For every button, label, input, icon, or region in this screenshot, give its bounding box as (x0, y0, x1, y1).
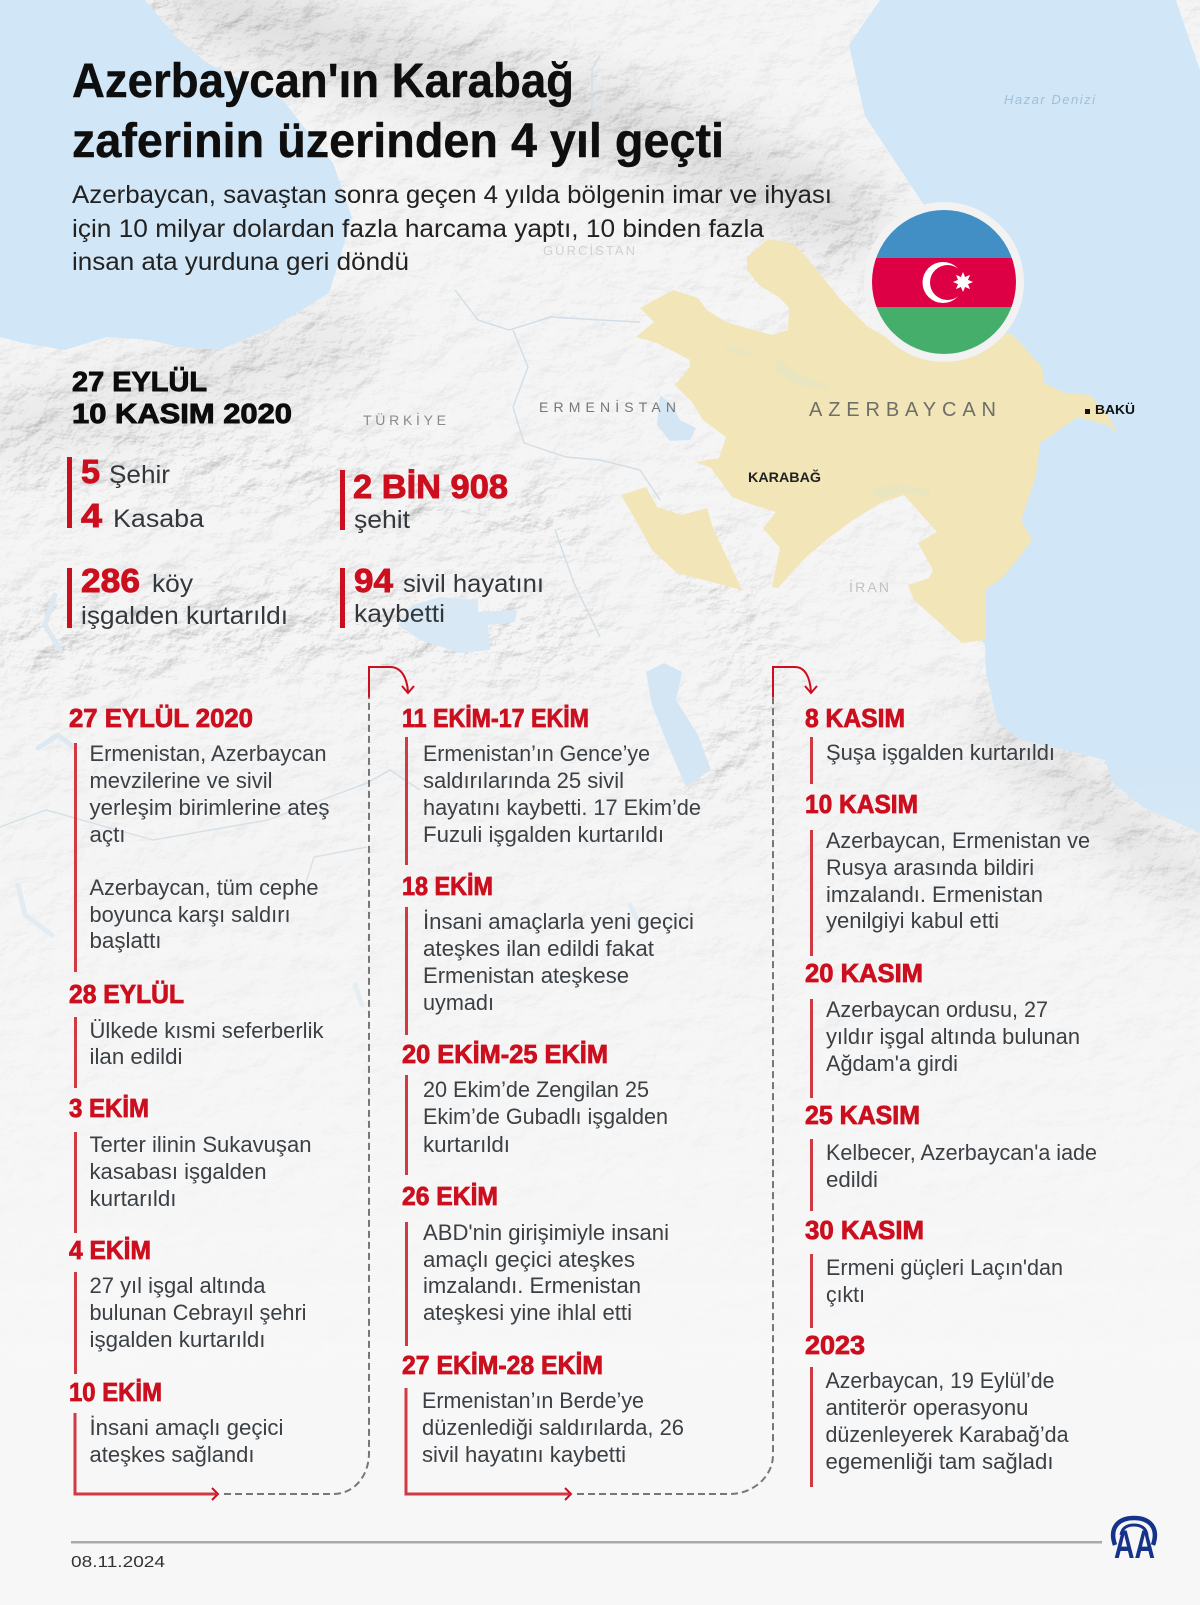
timeline entry: 18 Ekim: ateşkes ilan edildi fakat (423, 936, 654, 961)
timeline entry: 20 Kasım: yıldır işgal altında bulunan (826, 1024, 1080, 1049)
reservoirs (18, 595, 640, 1005)
icon: Azerbaijan flag (860, 202, 1030, 362)
label: Bakü: BAKÜ (1095, 402, 1135, 417)
timeline entry: 10 Kasım: 10 KASIM (805, 789, 918, 819)
timeline entry: 18 Ekim: Ermenistan ateşkese (423, 963, 629, 988)
timeline entry: 27 Eylül 2020 (69, 703, 330, 972)
timeline entry: 30 Kasım: 30 KASIM (805, 1215, 924, 1245)
fade to page background (0, 760, 1200, 1400)
arrow: column 1 to column 2 (75, 667, 414, 1500)
timeline entry: 25 Kasım: edildi (826, 1167, 878, 1192)
timeline entry: 20 Kasım (805, 958, 1080, 1098)
timeline entry: 26 Ekim: ABD'nin girişimiyle insani (423, 1220, 669, 1245)
timeline entry: 11-17 Ekim: hayatını kaybetti. 17 Ekim’de (423, 795, 701, 820)
map: inland water on Azerbaijan (725, 345, 930, 500)
label: Hazar Denizi: Hazar Denizi (1004, 92, 1096, 107)
label: Karabağ: KARABAĞ (748, 468, 821, 485)
timeline entry: 8 Kasım: Şuşa işgalden kurtarıldı (826, 740, 1055, 765)
date: 08.11.2024 (71, 1554, 165, 1571)
timeline entry: 2023: düzenleyerek Karabağ’da (826, 1422, 1069, 1447)
stat: 5 şehir, 4 kasaba: Kasaba (113, 505, 204, 533)
icon: AA logo: AA (1114, 1523, 1155, 1567)
timeline entry: 20-25 Ekim: kurtarıldı (423, 1132, 510, 1157)
lake: Urmia (646, 663, 711, 787)
timeline entry: 27-28 Ekim (402, 1350, 684, 1467)
timeline entry: 4 Ekim: 4 EKİM (69, 1235, 151, 1265)
timeline entry: 28 Eylül: Ülkede kısmi seferberlik (90, 1018, 325, 1043)
timeline entry: 3 Ekim: Terter ilinin Sukavuşan (90, 1132, 312, 1157)
stat: 2 bin 908 şehit (340, 468, 508, 534)
timeline entry: 11-17 Ekim: 11 EKİM-17 EKİM (402, 703, 589, 733)
arrow: column 2 to column 3 (406, 667, 817, 1500)
timeline entry: 26 Ekim: amaçlı geçici ateşkes (423, 1247, 635, 1272)
heading: war dates: 27 EYLÜL (72, 366, 207, 397)
stat: 286 köy: köy (152, 570, 194, 598)
timeline entry: 8 Kasım: 8 KASIM (805, 703, 905, 733)
timeline entry: 4 Ekim: işgalden kurtarıldı (90, 1327, 266, 1352)
subtitle (72, 181, 832, 276)
timeline entry: 27 Eylül 2020: boyunca karşı saldırı (90, 902, 290, 927)
timeline entry: 26 Ekim: ateşkesi yine ihlal etti (423, 1300, 632, 1325)
timeline entry: 10 Ekim: 10 EKİM (69, 1377, 162, 1407)
timeline entry: 3 Ekim: kasabası işgalden (90, 1159, 266, 1184)
timeline entry: 27 Eylül 2020: açtı (90, 822, 126, 847)
timeline entry: 27 Eylül 2020: Ermenistan, Azerbaycan (90, 741, 326, 766)
timeline entry: 10 Kasım: yenilgiyi kabul etti (826, 908, 999, 933)
stat: 2 bin 908 şehit: şehit (354, 506, 410, 534)
lake: Sevan (657, 395, 696, 441)
stat: 5 şehir, 4 kasaba: 4 (81, 497, 103, 534)
timeline entry: 20-25 Ekim: Ekim’de Gubadlı işgalden (423, 1104, 668, 1129)
timeline entry: 18 Ekim: 18 EKİM (402, 871, 493, 901)
timeline entry: 10 Kasım (805, 789, 1090, 956)
lake: Van (398, 597, 517, 653)
timeline entry: 2023: egemenliği tam sağladı (826, 1449, 1054, 1474)
heading: war dates: 10 KASIM 2020 (72, 398, 292, 429)
timeline entry: 18 Ekim: uymadı (423, 990, 494, 1015)
timeline entry: 27-28 Ekim: 27 EKİM-28 EKİM (402, 1350, 603, 1380)
timeline entry: 10 Kasım: imzalandı. Ermenistan (826, 882, 1043, 907)
timeline entry: 11-17 Ekim: saldırılarında 25 sivil (423, 768, 624, 793)
stat: 5 şehir, 4 kasaba (67, 453, 204, 534)
title (72, 55, 724, 168)
timeline entry: 2023: antiterör operasyonu (826, 1395, 1028, 1420)
timeline entry: 28 Eylül: ilan edildi (90, 1044, 182, 1069)
timeline entry: 4 Ekim: 27 yıl işgal altında (90, 1273, 266, 1298)
timeline entry: 20 Kasım: Ağdam'a girdi (826, 1051, 958, 1076)
stat: 5 şehir, 4 kasaba: Şehir (109, 461, 170, 489)
stat: 94 sivil: 94 (354, 562, 394, 599)
timeline entry: 26 Ekim: imzalandı. Ermenistan (423, 1273, 641, 1298)
timeline entry: 2023: Azerbaycan, 19 Eylül’de (826, 1368, 1054, 1393)
label: Türkiye: TÜRKİYE (363, 411, 446, 428)
timeline entry: 8 Kasım (805, 703, 1055, 784)
timeline entry: 4 Ekim (69, 1235, 306, 1374)
timeline entry: 27 Eylül 2020: başlattı (90, 928, 162, 953)
footer (71, 1518, 1155, 1571)
stat: 286 köy (67, 562, 288, 630)
timeline entry: 10 Kasım: Azerbaycan, Ermenistan ve (826, 828, 1090, 853)
timeline entry: 25 Kasım (805, 1100, 1097, 1211)
timeline entry: 25 Kasım: 25 KASIM (805, 1100, 920, 1130)
stat: 94 sivil: sivil hayatını (403, 570, 544, 598)
icon: AA logo (1113, 1518, 1155, 1567)
Caspian Sea (849, 0, 1200, 833)
title: zaferinin üzerinden 4 yıl geçti (72, 115, 724, 168)
timeline entry: 27 Eylül 2020: yerleşim birimlerine ateş (90, 795, 330, 820)
timeline entry: 26 Ekim (402, 1181, 669, 1346)
stat: 5 şehir, 4 kasaba: 5 (81, 453, 100, 490)
label: Gürcistan: GÜRCİSTAN (543, 243, 635, 258)
timeline entry: 28 Eylül (69, 979, 325, 1088)
timeline entry: 2023 (805, 1330, 1069, 1487)
stat: 286 köy: 286 (81, 562, 140, 599)
map labels (363, 92, 1135, 595)
timeline entry: 18 Ekim (402, 871, 694, 1035)
timeline entry: 20 Kasım: Azerbaycan ordusu, 27 (826, 997, 1048, 1022)
timeline entry: 10 Kasım: Rusya arasında bildiri (826, 855, 1034, 880)
timeline entry: 11-17 Ekim: Ermenistan’ın Gence’ye (423, 741, 650, 766)
timeline entry: 10 Ekim: ateşkes sağlandı (90, 1442, 254, 1467)
subtitle: için 10 milyar dolardan fazla harcama yaptı, 10 binden fazla (72, 215, 764, 243)
timeline entry: 3 Ekim: 3 EKİM (69, 1093, 149, 1123)
timeline entry: 27 Eylül 2020: 27 EYLÜL 2020 (69, 703, 253, 733)
timeline entry: 27 Eylül 2020: mevzilerine ve sivil (90, 768, 272, 793)
timeline entry: 10 Ekim (69, 1377, 284, 1467)
label: İran: İRAN (849, 578, 889, 595)
timeline entry: 3 Ekim (69, 1093, 312, 1233)
timeline entry: 27-28 Ekim: düzenlediği saldırılarda, 26 (422, 1415, 684, 1440)
timeline entry: 30 Kasım: çıktı (826, 1282, 865, 1307)
timeline entry: 2023: 2023 (805, 1330, 865, 1360)
timeline entry: 11-17 Ekim: Fuzuli işgalden kurtarıldı (423, 822, 664, 847)
map: Azerbaijan territory (621, 239, 1117, 643)
label: Azerbaycan: AZERBAYCAN (809, 399, 996, 421)
timeline entry: 27-28 Ekim: Ermenistan’ın Berde’ye (422, 1388, 644, 1413)
subtitle: Azerbaycan, savaştan sonra geçen 4 yılda bölgenin imar ve ihyası (72, 181, 832, 209)
timeline entry: 4 Ekim: bulunan Cebrayıl şehri (90, 1300, 306, 1325)
stat: 286 köy: işgalden kurtarıldı (81, 602, 288, 630)
Black Sea (0, 0, 352, 350)
timeline entry: 10 Ekim: İnsani amaçlı geçici (90, 1415, 284, 1440)
timeline entry: 20 Kasım: 20 KASIM (805, 958, 923, 988)
timeline entry: 30 Kasım (805, 1215, 1063, 1328)
timeline entry: 27-28 Ekim: sivil hayatını kaybetti (422, 1442, 626, 1467)
timeline entry: 27 Eylül 2020: Azerbaycan, tüm cephe (90, 875, 318, 900)
timeline entry: 3 Ekim: kurtarıldı (90, 1186, 176, 1211)
map: Nakhchivan (621, 487, 742, 590)
timeline entry: 11-17 Ekim (402, 703, 701, 865)
timeline entry: 18 Ekim: İnsani amaçlarla yeni geçici (423, 909, 694, 934)
timeline entry: 20-25 Ekim: 20 EKİM-25 EKİM (402, 1039, 608, 1069)
stat: 94 sivil: kaybetti (354, 600, 445, 628)
timeline entry: 28 Eylül: 28 EYLÜL (69, 979, 184, 1009)
timeline entry: 20-25 Ekim (402, 1039, 668, 1175)
title: Azerbaycan'ın Karabağ (72, 55, 574, 108)
subtitle: insan ata yurduna geri döndü (72, 248, 409, 276)
timeline entry: 26 Ekim: 26 EKİM (402, 1181, 498, 1211)
timeline entry: 30 Kasım: Ermeni güçleri Laçın'dan (826, 1255, 1063, 1280)
stat: 94 sivil (340, 562, 544, 628)
timeline entry: 25 Kasım: Kelbecer, Azerbaycan'a iade (826, 1140, 1097, 1165)
stat: 2 bin 908 şehit: 2 BİN 908 (353, 468, 508, 505)
marker: Bakü (1085, 409, 1090, 414)
timeline entry: 20-25 Ekim: 20 Ekim’de Zengilan 25 (423, 1077, 649, 1102)
heading: war dates (72, 366, 292, 429)
label: Ermenistan: ERMENİSTAN (539, 398, 676, 415)
